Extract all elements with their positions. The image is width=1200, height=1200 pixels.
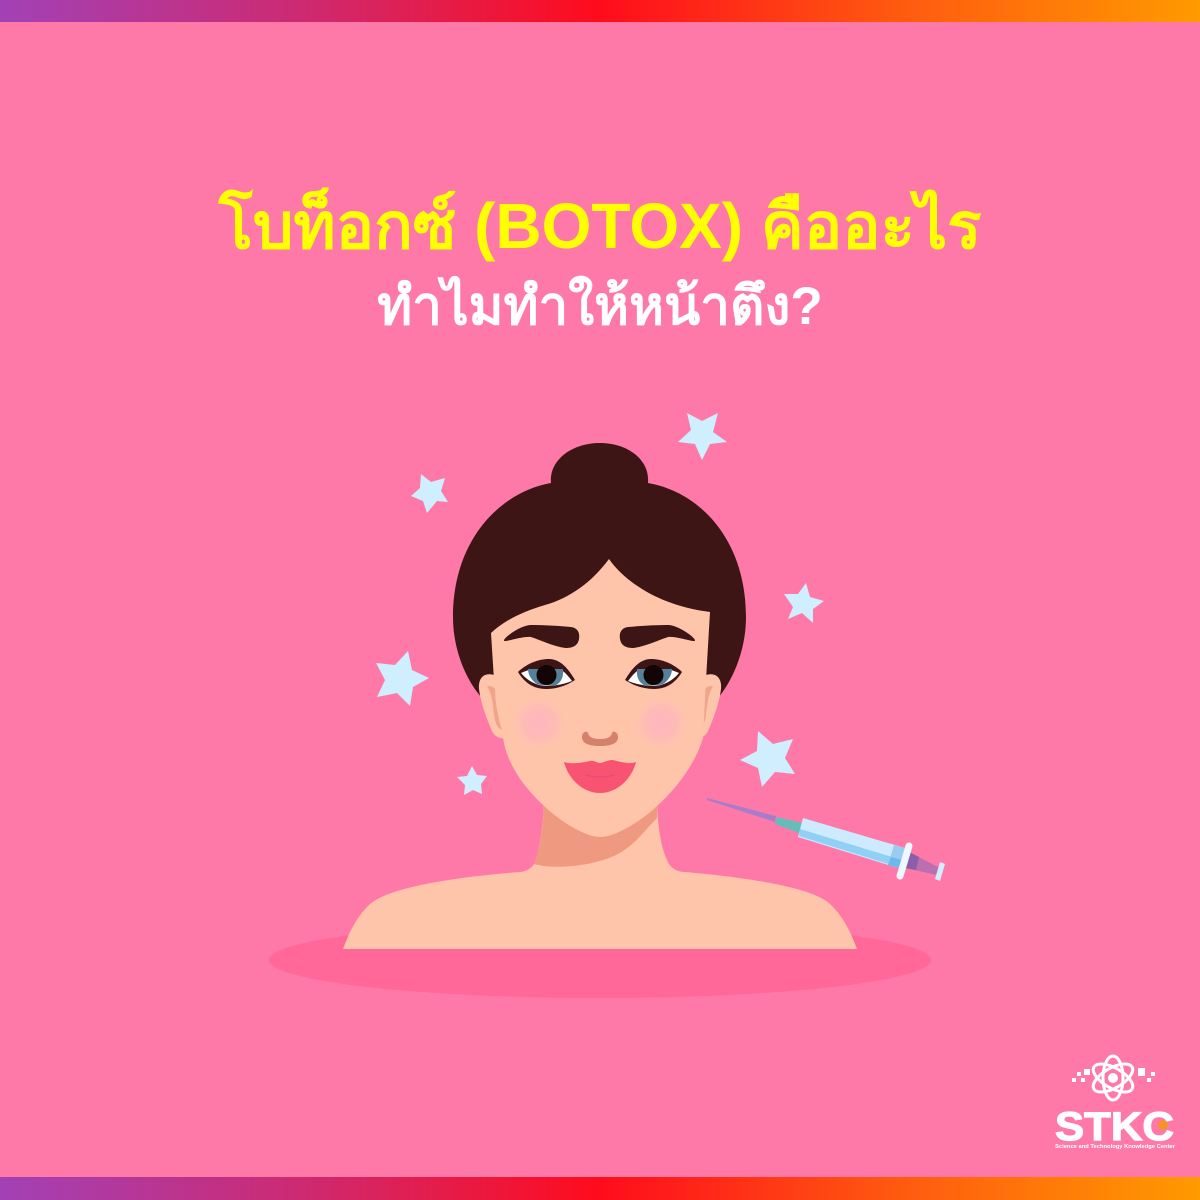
subtitle: ทำไมทำให้หน้าตึง? — [377, 275, 823, 336]
syringe — [707, 798, 945, 881]
logo: STKC — [1055, 1056, 1176, 1150]
nose — [582, 732, 618, 746]
star: lower right — [740, 731, 795, 787]
bottom gradient bar — [0, 1177, 1200, 1200]
logo tagline: Science and Technology Knowledge Center — [1055, 1144, 1176, 1150]
neck shadow — [534, 800, 657, 867]
needle — [707, 798, 776, 822]
logo atom icon — [1089, 1056, 1137, 1100]
right eye — [625, 659, 682, 689]
plunger cap — [935, 862, 945, 881]
barrel end shade — [888, 845, 905, 868]
star: right — [784, 583, 824, 623]
top gradient bar — [0, 0, 1200, 22]
logo orange dot — [1158, 1120, 1168, 1130]
right cheek blush — [632, 694, 690, 752]
left inner ear — [487, 686, 502, 730]
star: left large — [376, 651, 429, 706]
flange — [900, 846, 909, 876]
needle hub — [775, 817, 802, 833]
plunger rod — [905, 851, 938, 875]
lips — [564, 760, 636, 793]
lip line — [585, 775, 615, 777]
face — [491, 559, 710, 837]
left cheek blush — [510, 694, 568, 752]
star: top right — [678, 413, 727, 460]
neck and shoulders — [343, 795, 857, 949]
star: lower left small — [457, 766, 487, 795]
left eye — [518, 659, 575, 689]
hair — [453, 443, 746, 698]
right inner ear — [698, 686, 713, 730]
left ear — [479, 674, 506, 738]
left eyebrow — [504, 625, 579, 648]
illustration: woman portrait — [343, 443, 857, 949]
logo wordmark: STKC — [1055, 1105, 1174, 1149]
barrel liquid — [799, 829, 902, 867]
right eyebrow — [620, 625, 695, 648]
ground shadow ellipse — [269, 922, 931, 998]
logo pixel squares — [1072, 1068, 1155, 1082]
stars — [376, 413, 824, 795]
right ear — [694, 674, 721, 738]
title: โบท็อกซ์ (BOTOX) คืออะไร — [217, 188, 982, 262]
star: top left — [411, 474, 448, 513]
barrel — [798, 818, 905, 868]
